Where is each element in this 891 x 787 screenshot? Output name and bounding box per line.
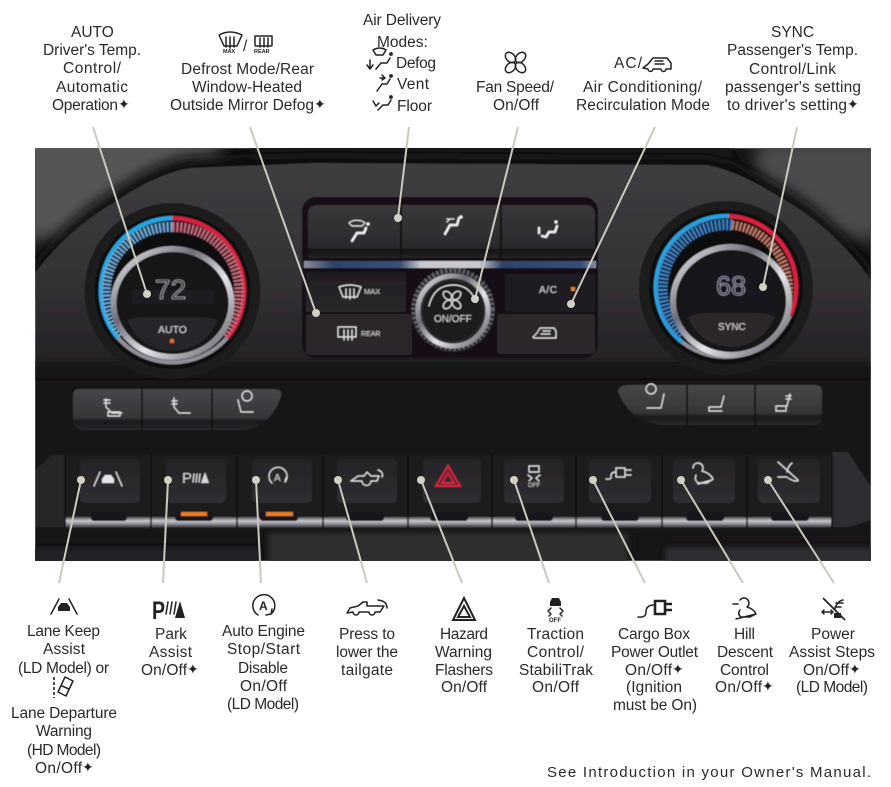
icon: tailgate <box>347 600 387 615</box>
label: lane keep / lane departure: Lane Departure <box>11 705 117 722</box>
leader: AC <box>567 127 655 308</box>
label: hill descent: Hill <box>734 626 755 643</box>
leader: auto stop <box>252 476 261 583</box>
switch row <box>65 455 832 528</box>
label: power assist steps: On/Off <box>803 662 850 679</box>
icon: hazard triangle <box>453 598 475 620</box>
footnote: See Introduction in your Owner's Manual. <box>547 764 871 781</box>
label: air delivery modes: Floor <box>397 98 432 115</box>
lower dark fade <box>35 362 871 376</box>
defrost and A/C buttons: MAX <box>364 287 380 296</box>
label: power assist steps <box>789 598 875 696</box>
amber indicators <box>181 512 207 516</box>
label: cargo power outlet: Power Outlet <box>611 644 699 661</box>
defrost and A/C buttons: A/C <box>539 285 557 296</box>
icon: auto stop: A <box>259 599 268 613</box>
right temperature knob: 68 <box>716 271 746 301</box>
label: AUTO driver's temp <box>43 24 141 114</box>
label: defrost: Defrost Mode/Rear <box>181 61 314 78</box>
label: air delivery modes: Defog <box>396 55 436 72</box>
leader: hazard <box>417 476 462 583</box>
label: cargo power outlet <box>611 601 699 714</box>
icon: max defrost: MAX <box>223 49 236 55</box>
icon: recirculation <box>643 58 671 72</box>
label: SYNC <box>725 24 861 114</box>
leader: fan speed <box>471 127 518 303</box>
switch icons <box>94 462 798 489</box>
shadow under bezel edge <box>35 153 871 300</box>
label: park assist <box>141 597 199 679</box>
left temperature knob <box>84 203 260 379</box>
icon: lane keep <box>51 599 77 614</box>
label: SYNC: Control/Link <box>749 61 836 78</box>
label: cargo power outlet: ✦ <box>672 662 684 678</box>
left temperature knob: 72 <box>155 274 186 305</box>
label: cargo power outlet: Cargo Box <box>618 626 690 643</box>
label: park assist: Assist <box>149 644 193 661</box>
label: tailgate <box>336 600 398 679</box>
leader: cargo outlet <box>589 476 645 583</box>
label: SYNC: to driver's setting <box>727 97 847 114</box>
label: hazard: Hazard <box>440 626 488 643</box>
label: AUTO driver's temp: AUTO <box>71 24 114 41</box>
label: auto engine stop: Stop/Start <box>227 641 301 658</box>
label: lane keep / lane departure: (LD Model) or <box>18 660 109 677</box>
label: lane keep / lane departure: (HD Model) <box>27 742 101 759</box>
switch icons: OFF <box>528 483 540 489</box>
label: park assist: ✦ <box>187 662 199 678</box>
leader: defrost <box>250 127 320 317</box>
centre button cluster <box>302 197 598 358</box>
lower trim shapes <box>30 452 880 566</box>
label: lane keep / lane departure: On/Off <box>35 760 83 777</box>
label: hill descent: On/Off <box>715 679 763 696</box>
label: tailgate: lower the <box>336 644 398 661</box>
icon: hill descent <box>733 598 756 619</box>
label: tailgate: tailgate <box>341 662 393 679</box>
right seat buttons <box>618 384 822 426</box>
icon: power steps <box>822 598 845 620</box>
label: power assist steps: Assist Steps <box>789 644 875 661</box>
label: traction: On/Off <box>532 679 580 696</box>
label: lane keep / lane departure: ✦ <box>82 760 94 776</box>
defrost and A/C buttons <box>306 272 595 355</box>
icon: floor mode <box>373 95 393 110</box>
label: fan speed <box>476 50 555 114</box>
label: hill descent <box>715 598 774 696</box>
label: traction: StabiliTrak <box>519 662 593 679</box>
label: fan speed: Fan Speed/ <box>476 79 555 96</box>
label: AUTO driver's temp: Driver's Temp. <box>43 42 141 59</box>
label: air delivery modes: Modes: <box>377 34 428 51</box>
switch dividers <box>65 455 832 528</box>
label: air conditioning: Recirculation Mode <box>576 97 710 114</box>
label: cargo power outlet: must be On) <box>613 697 697 714</box>
label: power assist steps: Power <box>811 626 855 643</box>
leader: AUTO <box>93 127 151 298</box>
label: SYNC: passenger's setting <box>725 79 861 96</box>
icon: rear defrost: REAR <box>254 49 270 55</box>
label: lane keep / lane departure <box>11 599 117 777</box>
icon: rear defrost <box>254 36 272 55</box>
icon: park assist: P <box>152 597 165 625</box>
icon: max defrost <box>219 32 242 55</box>
leader: SYNC <box>759 127 797 291</box>
label: SYNC: ✦ <box>847 97 859 113</box>
left seat buttons <box>73 389 281 430</box>
label: SYNC: Passenger's Temp. <box>727 42 858 59</box>
chrome divider strip <box>304 261 596 268</box>
label: AUTO driver's temp: Control/ <box>63 60 122 77</box>
label: air conditioning <box>576 55 710 114</box>
label: hazard <box>435 598 493 696</box>
upper trim, centre shadow <box>244 148 736 166</box>
label: defrost: Outside Mirror Defog <box>170 97 314 114</box>
label: AUTO driver's temp: Operation <box>52 97 118 114</box>
label: defrost: Window-Heated <box>192 79 302 96</box>
leader: tailgate <box>334 476 367 583</box>
label: lane keep / lane departure: Lane Keep <box>27 623 100 640</box>
label: defrost: ✦ <box>314 97 326 113</box>
label: auto engine stop <box>222 595 305 713</box>
label: fan speed: On/Off <box>493 97 540 114</box>
leader: traction <box>510 476 549 583</box>
label: park assist: Park <box>155 626 187 643</box>
label: auto engine stop: On/Off <box>240 678 288 695</box>
label: traction: Control/ <box>527 644 585 661</box>
strip notches <box>90 516 810 522</box>
leader: lane keep <box>59 476 85 583</box>
label: hazard: Flashers <box>435 662 493 679</box>
label: park assist: On/Off <box>141 662 188 679</box>
leader: park assist <box>163 476 172 583</box>
fan glyph <box>442 290 462 310</box>
label: power assist steps: (LD Model) <box>796 679 868 696</box>
fan knob: ON/OFF <box>434 314 472 325</box>
chrome strip <box>65 517 832 528</box>
label: air delivery modes: Vent <box>397 76 430 93</box>
label: traction: Traction <box>527 626 584 643</box>
label: auto engine stop: Auto Engine <box>222 623 305 640</box>
air delivery buttons <box>308 205 595 258</box>
label: hill descent: ✦ <box>762 679 774 695</box>
label: air delivery modes <box>363 12 441 115</box>
switch icons: P <box>182 470 192 487</box>
leader: power steps <box>764 476 834 583</box>
label: air conditioning: AC/ <box>614 55 643 72</box>
right temperature knob <box>639 201 813 375</box>
left temperature knob: AUTO <box>158 324 187 336</box>
label: hazard: Warning <box>435 644 492 661</box>
leader: air delivery <box>394 127 409 222</box>
label: hill descent: Descent <box>717 644 774 661</box>
label: defrost <box>170 32 326 114</box>
label: air conditioning: Air Conditioning/ <box>583 79 703 96</box>
defrost and A/C buttons: REAR <box>361 331 380 338</box>
icon: fan <box>503 50 528 75</box>
label: SYNC: SYNC <box>771 24 814 41</box>
label: tailgate: Press to <box>339 626 395 643</box>
label: auto engine stop: Disable <box>238 660 288 677</box>
upper trim, left highlight <box>20 130 220 240</box>
label: AUTO driver's temp: Automatic <box>56 79 128 96</box>
label: auto engine stop: (LD Model) <box>227 696 299 713</box>
label: traction <box>519 598 593 696</box>
label: AUTO driver's temp: ✦ <box>118 97 130 113</box>
icon: vent mode <box>377 74 393 91</box>
icon: plug <box>638 601 672 617</box>
icon: traction off: OFF <box>549 618 561 624</box>
upper trim, right highlight <box>755 140 885 240</box>
label: hill descent: Control <box>720 662 769 679</box>
label: power assist steps: ✦ <box>849 662 861 678</box>
fan knob <box>411 268 495 352</box>
switch faces <box>80 459 820 503</box>
label: air delivery modes: Air Delivery <box>363 12 441 29</box>
leader: hill descent <box>677 476 743 583</box>
right temperature knob: SYNC <box>718 322 746 333</box>
label: lane keep / lane departure: Assist <box>43 641 86 658</box>
icon: defog mode <box>367 48 393 69</box>
label: defrost: / <box>243 38 248 55</box>
label: lane keep / lane departure: Warning <box>36 723 92 740</box>
label: hazard: On/Off <box>441 679 488 696</box>
icon: lane departure <box>54 677 73 698</box>
curved bezel panel <box>35 163 871 370</box>
label: cargo power outlet: (Ignition <box>626 679 682 696</box>
label: cargo power outlet: On/Off <box>625 662 673 679</box>
switch icons: A <box>274 473 281 484</box>
dashboard photo <box>20 130 885 566</box>
